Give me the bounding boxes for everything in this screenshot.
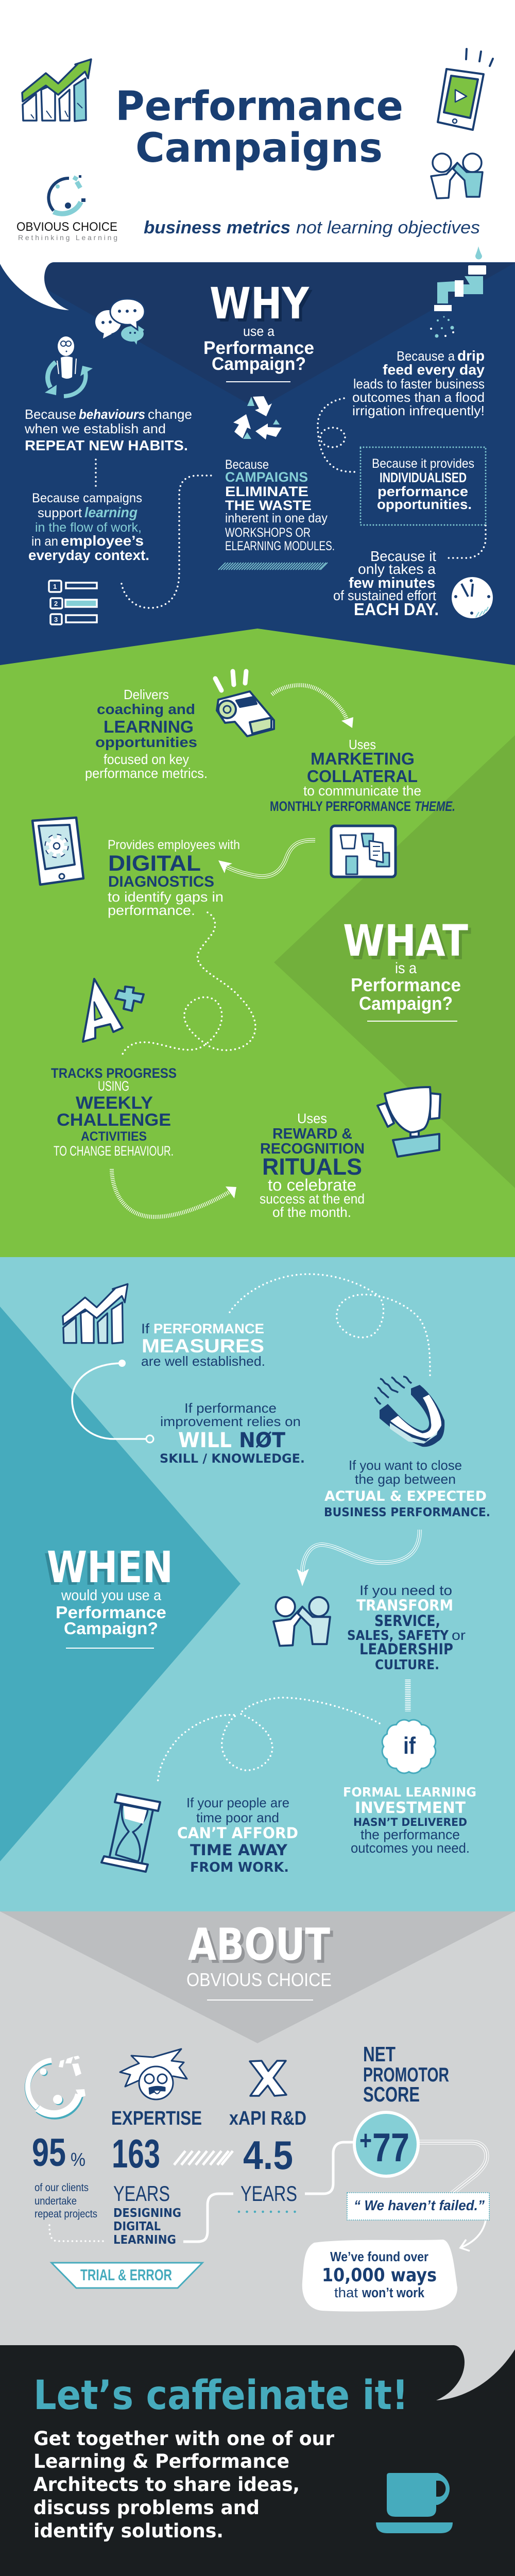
text: marketing collateral: THEME. [415, 799, 455, 814]
stat: 163 years: DIGITAL [113, 2220, 161, 2233]
stat: 95 percent: of our clients [35, 2182, 89, 2194]
heading: what: Campaign? [359, 993, 453, 1014]
text: eliminate the waste: WORKSHOPS OR [225, 526, 311, 540]
text: coaching [85, 687, 208, 781]
heading: what: WHAT [346, 919, 471, 970]
arrow: triple line to diagnostics [218, 840, 315, 876]
stat: 163 years [112, 2131, 181, 2247]
text: performance measures: If [141, 1321, 150, 1336]
badge: if: if [403, 1732, 416, 1759]
callout: 10000 ways: We’ve found over [330, 2249, 428, 2264]
stat: 163 years: 163 [112, 2131, 160, 2176]
text: flow of work: learning [84, 504, 138, 520]
tagline: business metrics [144, 218, 290, 238]
callout: individualised: opportunities. [377, 497, 472, 512]
text: rituals: of the month. [272, 1205, 351, 1220]
text: actual and expected: ACTUAL & EXPECTED [324, 1488, 487, 1504]
text: flow of work: in the flow of work, [35, 520, 142, 535]
callout: individualised: INDIVIDUALISED [380, 470, 467, 485]
text: drip feed: drip [457, 348, 485, 364]
text: drip feed: leads to faster business [353, 376, 485, 392]
stat: 4.5 years: YEARS [241, 2181, 297, 2206]
text: eliminate the waste: CAMPAIGNS [225, 469, 308, 485]
heading: why: Performance [203, 338, 314, 358]
logo: white mark [27, 2056, 85, 2116]
text: formal learning: the performance [360, 1827, 460, 1842]
stat: expertise labels [111, 2108, 306, 2129]
text: coaching: Delivers [124, 687, 169, 702]
icon: numbered list: 2 [54, 600, 58, 607]
icon: water drop and tap [430, 246, 486, 338]
text: digital diagnostics [108, 838, 240, 918]
text: will not skill: improvement relies on [160, 1414, 301, 1429]
text: formal learning: INVESTMENT [355, 1799, 466, 1817]
text: performance measures: PERFORMANCE [153, 1321, 264, 1336]
text: rituals [260, 1111, 365, 1220]
logo: Obvious Choice: Rethinking Learning [18, 233, 117, 242]
heading: about: ABOUT [191, 1922, 333, 1974]
text: flow of work [28, 491, 149, 563]
text: will not skill: WILL [178, 1429, 232, 1452]
text: transform [347, 1583, 466, 1673]
text: behaviours: Because [25, 406, 76, 422]
text: behaviours [24, 406, 192, 453]
title [115, 83, 403, 172]
arrow: quote to blob [460, 2221, 486, 2251]
heading: when: WHEN [47, 1542, 173, 1592]
icon: coffee cup [376, 2473, 453, 2533]
text: transform: TRANSFORM [356, 1597, 453, 1614]
stat: expertise labels: EXPERTISE [111, 2108, 202, 2129]
heading: about [186, 1919, 333, 2001]
heading: about: OBVIOUS CHOICE [186, 1969, 332, 1990]
text: rituals: REWARD & [272, 1126, 352, 1142]
heading: net promotor score: PROMOTOR [363, 2064, 449, 2086]
heading: what: Performance [351, 974, 461, 995]
callout: individualised: Because it provides [372, 456, 474, 471]
text: actual and expected [324, 1458, 490, 1519]
icon: numbered list: 1 [53, 583, 57, 590]
text: will not skill: SKILL / KNOWLEDGE. [160, 1451, 305, 1466]
icon: tablet with play button [438, 49, 493, 130]
text: drip feed: irrigation infrequently! [352, 403, 485, 418]
text: weekly challenge: TO CHANGE BEHAVIOUR. [54, 1143, 174, 1159]
text: actual and expected: If you want to close [349, 1458, 462, 1473]
stat: 95 percent: 95 [32, 2131, 66, 2175]
text: get together: Learning & Performance [33, 2450, 289, 2472]
heading: why: WHY [213, 281, 313, 332]
icon: einstein face [120, 2049, 187, 2099]
text: few minutes: of sustained effort [333, 588, 436, 603]
text: get together: Architects to share ideas, [33, 2473, 300, 2496]
text: marketing collateral: MONTHLY PERFORMANCE [270, 799, 411, 814]
icon: speech bubbles [95, 299, 145, 345]
text: transform: If you need to [359, 1583, 452, 1598]
text: transform: SALES, SAFETY [347, 1628, 449, 1643]
tagline: not learning objectives [296, 218, 480, 238]
arrow: triple line to high five [297, 1530, 420, 1586]
connector: triple line to quote [419, 2142, 487, 2194]
connector: measures to will [72, 1360, 153, 1443]
text: transform: CULTURE. [375, 1657, 439, 1673]
text: flow of work: Because campaigns [32, 491, 142, 505]
icon: numbered list: 3 [54, 616, 58, 623]
callout: quote [347, 2193, 489, 2220]
text: flow of work: everyday context. [28, 547, 149, 563]
title: Performance [115, 83, 403, 130]
heading: what: WHAT [343, 916, 468, 966]
text: digital diagnostics: Provides employees with [108, 838, 240, 852]
stat: 95 percent [32, 2131, 97, 2220]
text: performance measures: MEASURES [142, 1335, 264, 1357]
text: time poor: TIME AWAY [190, 1841, 288, 1859]
callout: 10000 ways [302, 2240, 457, 2312]
stat: NPS +77: + [359, 2126, 372, 2156]
text: formal learning [343, 1785, 476, 1856]
icon: recycle arrows [233, 396, 282, 439]
text: time poor: time poor and [196, 1810, 279, 1825]
panel: what [0, 629, 515, 1257]
text: formal learning: outcomes you need. [351, 1840, 470, 1856]
stat: 4.5 years [239, 2132, 300, 2212]
heading: when [44, 1542, 173, 1649]
header panel [16, 49, 493, 242]
icon: A plus grade [83, 979, 144, 1042]
text: eliminate the waste: ELIMINATE [225, 484, 308, 499]
text: coaching: opportunities [95, 734, 197, 750]
text: transform: LEADERSHIP [359, 1640, 453, 1658]
text: performance measures [141, 1321, 265, 1369]
text: coaching: performance metrics. [85, 766, 208, 781]
text: transform: or [452, 1628, 466, 1643]
heading: why: use a [243, 324, 275, 339]
stat: NPS +77: 77 [372, 2125, 409, 2170]
text: get together [33, 2428, 335, 2542]
stat: 163 years: LEARNING [113, 2233, 176, 2247]
panel: why [0, 246, 515, 674]
text: weekly challenge: ACTIVITIES [81, 1129, 147, 1144]
icon: magnet [374, 1377, 444, 1447]
text: weekly challenge: TRACKS PROGRESS [51, 1065, 177, 1081]
text: time poor [177, 1795, 298, 1875]
stat: 95 percent: % [71, 2149, 85, 2170]
icon: letter X [250, 2061, 286, 2096]
badge: if [382, 1720, 436, 1773]
tagline [144, 218, 480, 238]
heading: what [343, 916, 471, 1022]
icon: numbered list [49, 581, 97, 624]
callout: 10000 ways: 10,000 ways [322, 2265, 437, 2286]
text: formal learning: FORMAL LEARNING [343, 1785, 476, 1800]
panel: call to action [0, 2345, 515, 2576]
stat: 163 years: DESIGNING [113, 2207, 181, 2220]
text: digital diagnostics: to identify gaps in [108, 889, 224, 905]
text: drip feed [352, 348, 485, 418]
text: flow of work: in an [31, 534, 58, 549]
text: few minutes [333, 548, 439, 619]
text: behaviours: change [148, 406, 192, 422]
text: few minutes: only takes a [358, 561, 436, 577]
heading: about: ABOUT [188, 1919, 330, 1971]
arrow: hatched to rituals [112, 1169, 236, 1217]
logo: Obvious Choice [16, 175, 117, 242]
label: trial and error [52, 2263, 202, 2288]
text: eliminate the waste: Because [225, 457, 269, 472]
text: few minutes: few minutes [349, 575, 435, 591]
stat: 4.5 years: 4.5 [243, 2132, 293, 2178]
text: get together: identify solutions. [33, 2520, 224, 2542]
logo: Obvious Choice: OBVIOUS CHOICE [16, 220, 117, 234]
text: weekly challenge: USING [98, 1078, 129, 1094]
text: get together: discuss problems and [33, 2497, 260, 2519]
icon: high five white [273, 1597, 330, 1646]
heading: when: WHEN [44, 1545, 170, 1595]
heading: why: WHY [210, 278, 310, 329]
text: digital diagnostics: DIAGNOSTICS [108, 873, 214, 890]
heading: when: Performance [56, 1603, 166, 1622]
text: weekly challenge: WEEKLY [76, 1093, 153, 1113]
text: coaching: coaching and [97, 701, 195, 717]
text: weekly challenge [51, 1065, 177, 1159]
text: time poor: CAN’T AFFORD [177, 1824, 298, 1842]
text: marketing collateral [270, 737, 455, 814]
text: actual and expected: the gap between [355, 1471, 456, 1487]
icon: white bar chart [63, 1284, 128, 1344]
text: rituals: success at the end [260, 1191, 365, 1207]
text: behaviours: REPEAT NEW HABITS. [25, 437, 188, 453]
text: will not skill: If performance [184, 1400, 277, 1416]
text: behaviours: when we establish and [24, 421, 166, 436]
heading: what: is a [395, 960, 417, 977]
stat: 95 percent: undertake [35, 2195, 77, 2207]
icon: clock [452, 577, 493, 618]
text: marketing collateral: to communicate the [303, 783, 421, 799]
text: eliminate the waste: THE WASTE [225, 498, 312, 513]
text: behaviours: behaviours [79, 406, 145, 422]
text: actual and expected: BUSINESS PERFORMANCE. [324, 1506, 490, 1519]
text: formal learning: HASN’T DELIVERED [353, 1816, 467, 1828]
heading: caffeinate: Let’s caffeinate it! [33, 2372, 408, 2419]
text: rituals: to celebrate [268, 1176, 356, 1194]
panel: about [0, 1911, 515, 2345]
text: drip feed: Because a [397, 348, 455, 364]
speech bubble tail [0, 260, 69, 310]
icon: tablet with gear [32, 818, 83, 885]
callout: individualised: performance [377, 484, 468, 499]
stat: NPS +77 [354, 2112, 418, 2176]
text: coaching: LEARNING [104, 717, 194, 736]
icon: rising bar chart [22, 59, 91, 121]
text: marketing collateral: MARKETING [311, 749, 415, 768]
text: eliminate the waste: ELEARNING MODULES. [225, 539, 335, 553]
text: few minutes: Because it [370, 548, 436, 564]
icon: notice board [331, 826, 396, 877]
stat: 95 percent: repeat projects [35, 2208, 97, 2220]
text: get together: Get together with one of our [33, 2428, 335, 2450]
text: coaching: focused on key [104, 752, 189, 767]
text: rituals: RITUALS [262, 1154, 362, 1180]
text: rituals: RECOGNITION [260, 1141, 365, 1157]
text: drip feed: feed every day [383, 362, 485, 378]
text: transform: SERVICE, [374, 1612, 440, 1630]
text: performance measures: are well established. [141, 1353, 265, 1369]
speech bubble tail [436, 2345, 515, 2400]
heading: why: Campaign? [212, 354, 306, 374]
heading: when: Campaign? [64, 1619, 158, 1638]
icon: whistle [215, 671, 274, 736]
text: flow of work: employee’s [61, 533, 144, 549]
text: digital diagnostics: performance. [108, 903, 195, 918]
callout: 10000 ways: that [334, 2285, 358, 2300]
icon: person and habit loop [45, 336, 93, 396]
heading: net promotor score: SCORE [363, 2082, 420, 2106]
text: weekly challenge: CHALLENGE [57, 1110, 171, 1130]
text: will not skill [160, 1400, 305, 1466]
label: trial and error: TRIAL & ERROR [80, 2266, 172, 2284]
heading: when: would you use a [61, 1587, 162, 1604]
text: marketing collateral: Uses [349, 737, 376, 752]
text: time poor: If your people are [186, 1795, 289, 1810]
callout: quote: “ We haven’t failed.” [354, 2197, 485, 2213]
callout: 10000 ways: won’t work [362, 2285, 425, 2300]
text: time poor: FROM WORK. [190, 1860, 289, 1875]
icon: high five people [431, 154, 483, 198]
arrow: hatched to marketing [272, 685, 353, 728]
title: Campaigns [135, 125, 383, 172]
icon: hourglass [101, 1794, 160, 1872]
callout: individualised [360, 447, 486, 525]
panel: when [0, 1257, 515, 1911]
text: flow of work: support [38, 506, 82, 520]
stat: 163 years: YEARS [113, 2181, 170, 2206]
text: eliminate the waste [225, 457, 335, 553]
text: drip feed: outcomes than a flood [352, 389, 485, 405]
heading: net promotor score [363, 2042, 449, 2106]
text: digital diagnostics: DIGITAL [108, 851, 201, 876]
text: few minutes: EACH DAY. [354, 600, 439, 619]
heading: net promotor score: NET [363, 2042, 396, 2066]
text: will not skill: NØT [239, 1429, 286, 1452]
text: eliminate the waste: inherent in one day [225, 511, 328, 526]
text: rituals: Uses [297, 1111, 327, 1126]
icon: trophy [377, 1087, 440, 1157]
heading: why [203, 278, 314, 382]
stat: expertise labels: xAPI R&D [229, 2108, 306, 2129]
text: marketing collateral: COLLATERAL [307, 767, 418, 786]
